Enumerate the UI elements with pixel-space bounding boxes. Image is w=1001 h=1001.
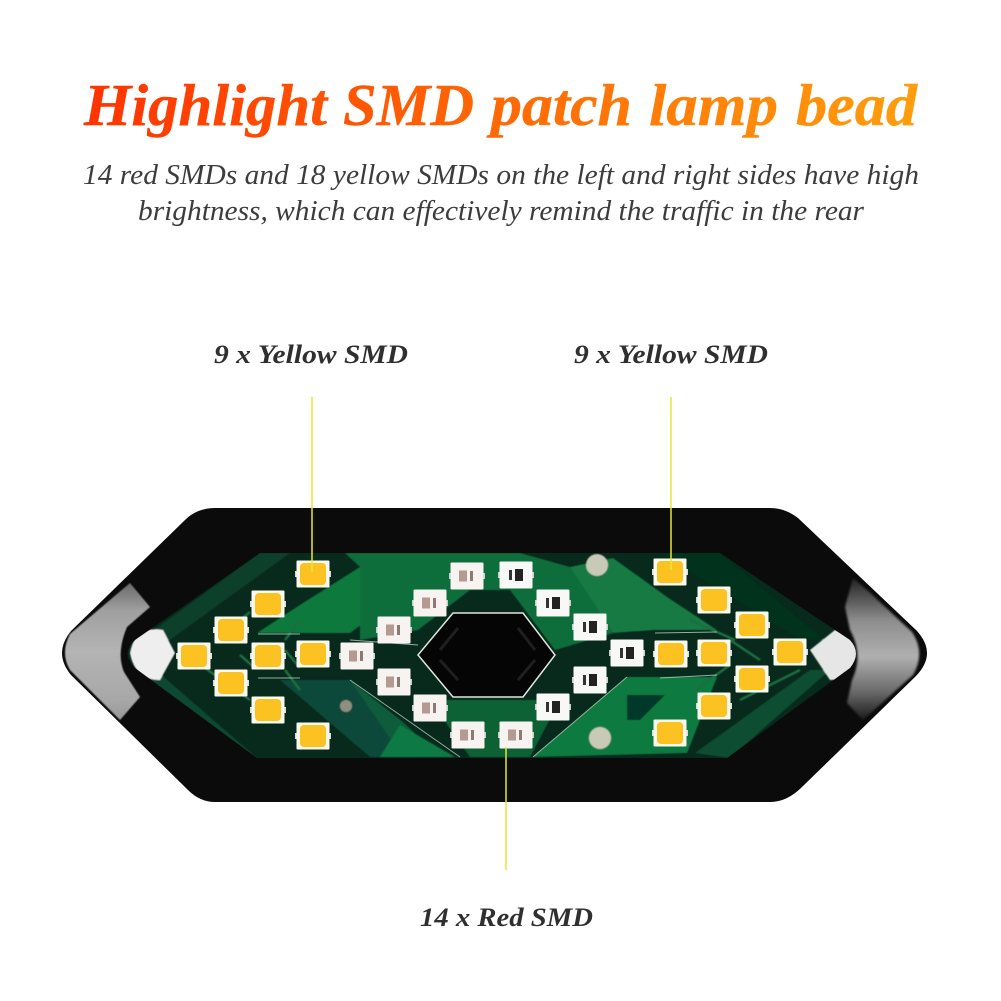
glass edge lines xyxy=(258,632,717,757)
red SMDs left half xyxy=(339,562,486,748)
title: SMD xyxy=(343,72,474,138)
subtitle xyxy=(83,159,919,227)
title: patch xyxy=(486,72,632,138)
center hexagon button xyxy=(418,613,555,697)
subtitle: 14 red SMDs and 18 yellow SMDs on the left and right sides have high xyxy=(83,159,919,191)
red SMDs right half xyxy=(498,562,645,748)
leader line: right yellow xyxy=(670,397,672,570)
circuit board window xyxy=(120,550,865,762)
infographic canvas xyxy=(62,84,927,926)
tail light xyxy=(62,508,927,802)
left yellow SMDs xyxy=(176,560,331,750)
right end cap xyxy=(845,578,919,720)
label: red SMD: 14 x Red SMD xyxy=(420,903,593,932)
right yellow SMDs xyxy=(652,558,808,746)
board green patches xyxy=(257,566,360,634)
left end cap xyxy=(65,583,150,720)
housing xyxy=(62,508,927,802)
copper traces xyxy=(205,612,800,700)
leader line: red xyxy=(505,747,507,870)
title: bead xyxy=(796,72,919,138)
solder pads xyxy=(586,554,608,576)
title xyxy=(83,72,919,138)
edge glass strips xyxy=(140,553,290,640)
title: lamp xyxy=(649,72,778,138)
white diffuser tips xyxy=(130,629,175,680)
subtitle: brightness, which can effectively remind the traffic in the rear xyxy=(138,195,865,227)
leader line: left yellow xyxy=(311,397,313,572)
label: right yellow SMD: 9 x Yellow SMD xyxy=(574,340,768,369)
title: Highlight xyxy=(83,72,329,138)
label: left yellow SMD: 9 x Yellow SMD xyxy=(214,340,408,369)
